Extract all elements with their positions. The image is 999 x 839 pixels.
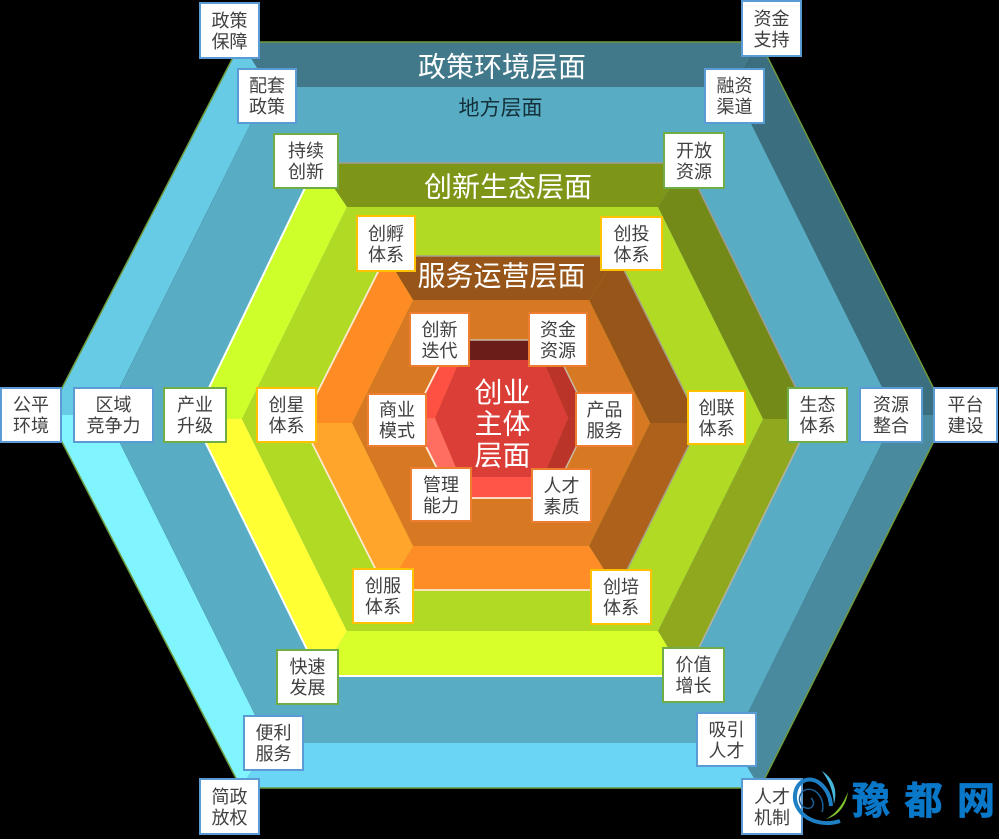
label: 创孵体系: 创孵 [368,224,404,244]
layer: entrepreneur core [412,340,590,498]
label: 便利服务 [243,715,304,771]
label: 创培体系: 创培 [603,577,639,597]
label: 商业模式: 模式 [379,421,415,441]
heading: innovation ecosystem: 创新生态层面 [424,172,592,202]
label: 持续创新: 持续 [288,141,324,161]
label: 政策保障: 保障 [212,32,248,52]
label: 资金资源 [528,312,588,367]
label: 创星体系: 创星 [268,395,304,415]
label: 商业模式 [367,393,427,447]
label: 公平环境: 公平 [13,395,49,415]
label: 创服体系 [352,568,414,624]
heading: entrepreneur core: 创业 [474,377,531,408]
label: 创孵体系: 体系 [368,244,404,264]
label: 配套政策 [237,68,297,124]
label: 区域竞争力: 竞争力 [86,416,140,436]
label: 人才素质: 人才 [544,476,580,496]
heading: entrepreneur core: 主体 [474,408,531,440]
label: 简政放权: 放权 [212,808,248,828]
label: 生态体系: 生态 [800,395,836,415]
heading: policy environment: 政策环境层面 [418,52,586,82]
label: 配套政策: 政策 [249,97,285,117]
label: 快速发展: 快速 [290,657,326,677]
label: 创服体系: 创服 [365,576,401,596]
label: 政策保障: 政策 [212,10,248,30]
label: 便利服务: 服务 [256,744,292,764]
label: 平台建设 [933,387,998,443]
label: 创联体系: 体系 [698,418,734,438]
label: 快速发展: 发展 [290,678,326,698]
label: 人才机制: 机制 [754,808,790,828]
label: 商业模式: 商业 [379,400,415,420]
label: 便利服务: 便利 [256,723,292,743]
label: 创新迭代: 创新 [422,320,458,340]
label: 创投体系: 创投 [614,224,650,244]
label: 资金支持: 支持 [754,30,790,50]
label: 持续创新 [273,133,339,189]
label: 人才素质 [531,468,592,523]
layer: service operations [302,256,700,590]
label: 创服体系: 体系 [365,597,401,617]
label: 政策保障 [199,2,260,59]
label: 产业升级: 产业 [177,395,213,415]
label: 创联体系 [687,390,746,445]
label: 创孵体系 [356,215,416,272]
heading: entrepreneur core: 层面 [474,440,531,471]
label: 管理能力: 管理 [423,474,459,494]
label: 资源整合: 整合 [873,416,909,436]
label: 开放资源: 开放 [676,140,712,160]
label: 创培体系: 体系 [603,598,639,618]
label: 价值增长: 价值 [676,655,712,675]
label: 吸引人才 [696,712,757,767]
label: 创投体系: 体系 [614,244,650,264]
label: 产品服务 [575,392,634,447]
label: 价值增长: 增长 [676,676,712,696]
label: 产业升级: 升级 [177,416,213,436]
label: 人才素质: 素质 [544,496,580,516]
label: 生态体系: 体系 [800,416,836,436]
label: 平台建设: 建设 [948,416,984,436]
label: 创星体系: 体系 [268,416,304,436]
label: 简政放权: 简政 [212,786,248,806]
label: 创星体系 [256,387,317,443]
label: 区域竞争力: 区域 [96,395,132,415]
label: 持续创新: 创新 [288,162,324,182]
label: 开放资源: 资源 [676,162,712,182]
label: 创投体系 [600,216,663,271]
label: 快速发展 [276,649,339,705]
label: 产业升级 [163,387,227,443]
label: 创联体系: 创联 [698,398,734,418]
label: 融资渠道 [704,68,765,124]
label: 融资渠道: 渠道 [716,97,752,117]
label: 创新迭代: 迭代 [422,340,458,360]
label: 吸引人才: 吸引 [708,720,744,740]
label: 资金支持 [741,0,802,57]
label: 产品服务: 服务 [586,420,622,440]
label: 资金支持: 资金 [754,8,790,28]
label: 生态体系 [787,387,848,443]
label: 资金资源: 资源 [540,340,576,360]
label: 人才机制 [741,778,803,835]
label: 产品服务: 产品 [586,400,622,420]
icon: swirl [795,771,848,823]
label: 资金资源: 资金 [540,320,576,340]
label: 公平环境 [0,387,62,443]
heading: service operations: 服务运营层面 [417,260,586,292]
label: 资源整合 [859,387,923,443]
layer: innovation ecosystem [194,163,811,676]
label: 配套政策: 配套 [249,76,285,96]
label: 区域竞争力 [73,387,154,443]
label: 简政放权 [199,778,260,835]
sub-heading: local level: 地方层面 [458,97,542,120]
label: 管理能力 [410,467,472,522]
label: 创新迭代 [409,312,470,367]
label: 管理能力: 能力 [423,496,459,516]
heading: entrepreneur core [474,377,531,471]
label: 融资渠道: 融资 [716,76,752,96]
label: 创培体系 [590,569,652,625]
label: 开放资源 [663,132,725,189]
label: 人才机制: 人才 [754,786,790,806]
label: 吸引人才: 人才 [708,740,744,760]
label: 资源整合: 资源 [873,395,909,415]
label: 价值增长 [662,647,725,703]
label: 平台建设: 平台 [948,395,984,415]
label: 公平环境: 环境 [13,416,49,436]
